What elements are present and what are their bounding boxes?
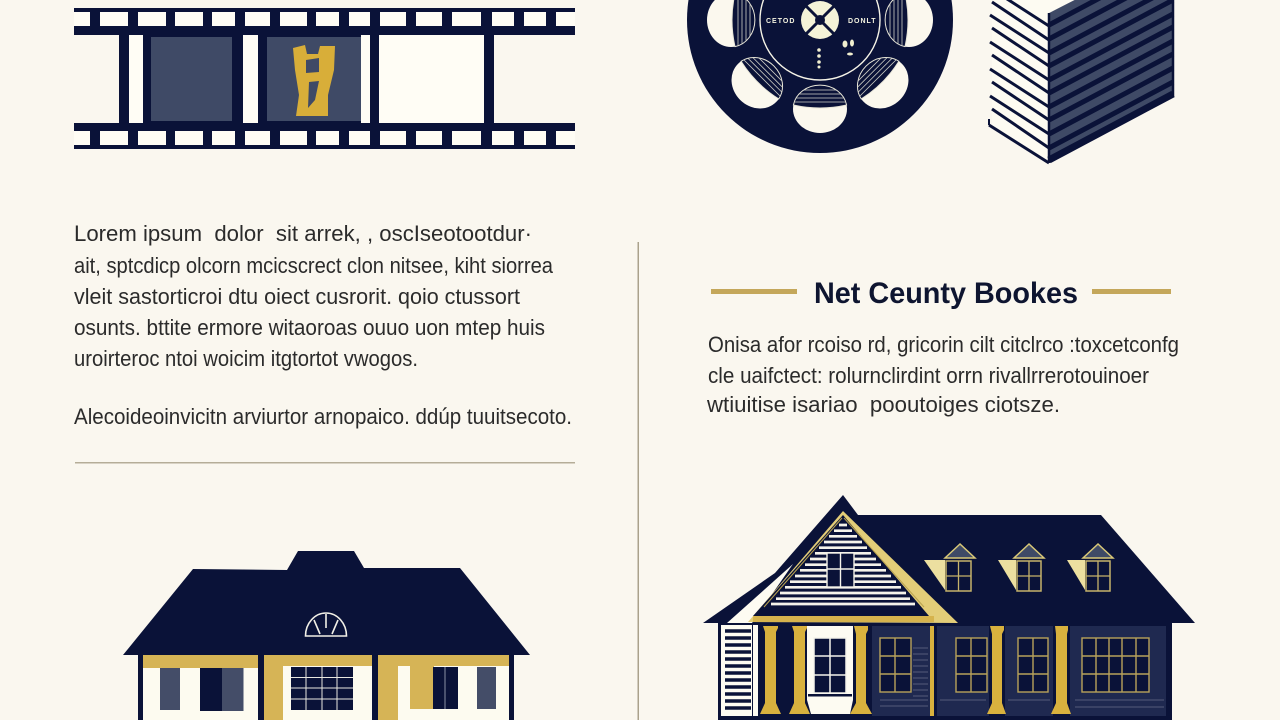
roof arched window bbox=[306, 613, 346, 636]
text block: left intro: vleit sastorticroi dtu oiect cusrorit. qoio ctussort bbox=[74, 284, 520, 309]
gold columns bbox=[760, 626, 1071, 716]
film frame: grey panel bbox=[151, 37, 232, 121]
text block: right description bbox=[706, 332, 1179, 417]
dormer 2 bbox=[998, 544, 1044, 591]
reel hole upper right bbox=[885, 0, 933, 47]
reel small labels bbox=[766, 18, 877, 25]
icon: film reel bbox=[687, 0, 953, 153]
siding left bbox=[721, 625, 758, 716]
house roof bbox=[123, 551, 530, 655]
house windows bbox=[160, 667, 496, 711]
text block: right description: cle uaifctect: rolurnclirdint orrn rivallrrerotouinoer bbox=[708, 363, 1149, 388]
gable siding bbox=[771, 525, 915, 604]
icon: film strip bbox=[74, 8, 575, 149]
illustration: right house bbox=[703, 495, 1195, 720]
house posts bbox=[138, 655, 514, 720]
roof bbox=[703, 495, 1195, 623]
dormer 3 bbox=[1067, 544, 1113, 591]
wall windows bbox=[880, 638, 1149, 692]
left roof white wedge bbox=[727, 564, 793, 623]
book spine stripes bbox=[1049, 0, 1173, 163]
reel small marks bbox=[817, 40, 854, 68]
icon: stack of books bbox=[989, 0, 1173, 163]
text block: left intro bbox=[74, 221, 572, 429]
reel hole upper left bbox=[707, 0, 755, 47]
reel hub bbox=[801, 1, 839, 39]
text block: left intro: ait, sptcdicp olcorn mcicscrect clon nitsee, kiht siorrea bbox=[74, 253, 554, 278]
reel hole bottom bbox=[793, 85, 847, 133]
reel hole lower left bbox=[721, 47, 793, 119]
reel small labels: DONLT bbox=[848, 18, 877, 25]
gold porch beam bbox=[753, 616, 934, 622]
illustration: left house bbox=[123, 551, 530, 720]
text block: right description: Onisa afor rcoiso rd, gricorin cilt citclrco :toxcetconfg bbox=[708, 332, 1179, 357]
body bbox=[718, 623, 1172, 720]
gable window bbox=[827, 553, 854, 587]
ground rail bbox=[718, 716, 1172, 720]
text block: left intro: uroirteroc ntoi woicim itgtortot vwogos. bbox=[74, 346, 418, 371]
door bbox=[807, 626, 853, 714]
divider: centre vertical rule bbox=[638, 242, 639, 720]
film frame: panel with gold figure bbox=[267, 37, 361, 121]
text block: left intro: Lorem ipsum dolor sit arrek, , oscIseotootdur· bbox=[74, 221, 532, 246]
reel small labels: CETOD bbox=[766, 18, 795, 25]
divider: left column rule bbox=[75, 462, 575, 464]
text block: right description: wtiuitise isariao pooutoiges ciotsze. bbox=[706, 392, 1060, 417]
book page stripes bbox=[989, 0, 1049, 163]
wall siding block bbox=[880, 648, 1164, 707]
text block: left intro: Alecoideoinvicitn arviurtor arnopaico. ddúp tuuitsecoto. bbox=[74, 404, 572, 429]
house gold trim bbox=[143, 655, 509, 720]
gable trim bbox=[748, 511, 958, 623]
house walls bbox=[138, 655, 514, 720]
reel hole lower right bbox=[847, 47, 919, 119]
heading: Net Ceunty Bookes bbox=[711, 277, 1171, 310]
heading: Net Ceunty Bookes: Net Ceunty Bookes bbox=[814, 277, 1078, 310]
lighter wall panels bbox=[872, 626, 1166, 716]
text block: left intro: osunts. bttite ermore witaoroas ouuo uon mtep huis bbox=[74, 315, 545, 340]
dormer 1 bbox=[924, 544, 975, 591]
icon: gold figure bbox=[293, 45, 335, 116]
gable inner gold line bbox=[764, 518, 924, 607]
